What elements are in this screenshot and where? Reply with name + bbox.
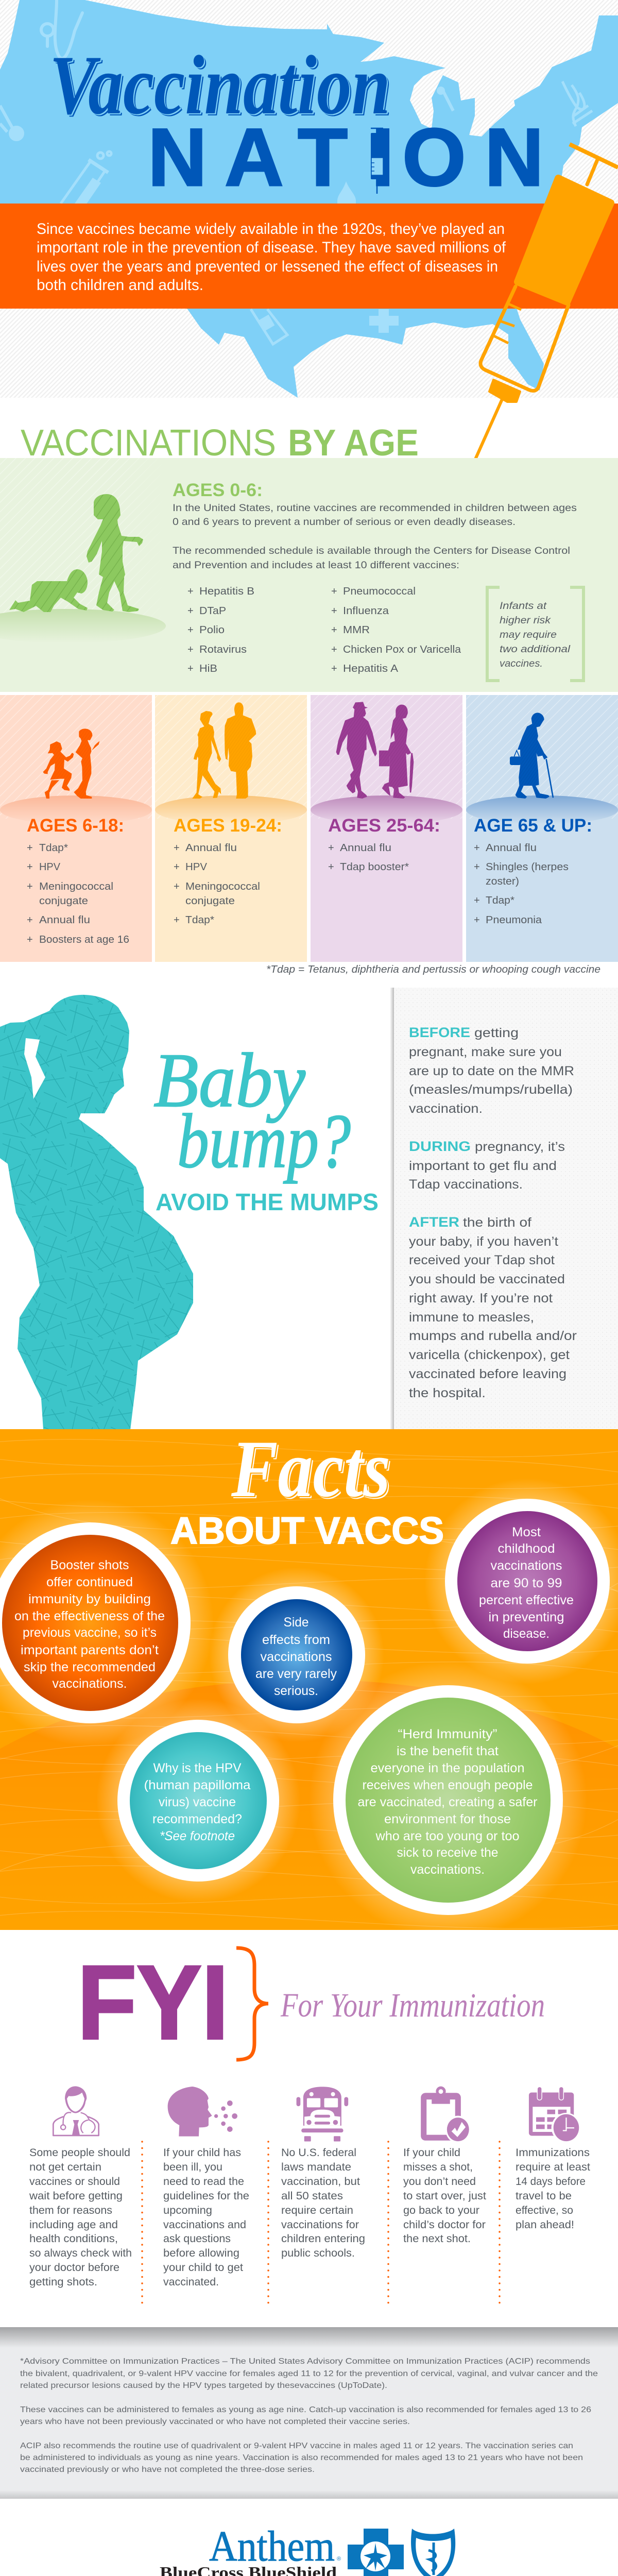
- list: vaccines column two: +: [331, 644, 337, 655]
- callout: effectiveness: Most: [512, 1525, 541, 1539]
- text block: ill child guidance: need to read the: [163, 2175, 244, 2188]
- text block: after: right away. If you’re not: [409, 1291, 553, 1306]
- panel: ages 25-64: [311, 695, 462, 962]
- list: vaccines column two: +: [331, 663, 337, 674]
- text block: ages 0-6 intro: 0 and 6 years to prevent a number of serious or even deadly diseases.: [173, 516, 516, 528]
- text block: after: your baby, if you haven’t: [409, 1234, 558, 1249]
- callout: herd immunity: receives when enough people: [363, 1778, 533, 1792]
- list: age 65 and up vaccines: +: [474, 895, 480, 906]
- list: ages 19-24 vaccines: HPV: [185, 861, 208, 873]
- text block: female catch-up: These vaccines can be administered to females as young as age nine. Catch-up vaccination is also recommended for females aged 13 to 26: [20, 2405, 591, 2414]
- list: vaccines column one: Rotavirus: [199, 644, 247, 655]
- list: ages 19-24 vaccines: conjugate: [185, 895, 235, 907]
- list: vaccines column one: +: [187, 624, 194, 636]
- callout: booster shots: previous vaccine, so it’s: [23, 1625, 157, 1640]
- map: United States, southern part: [185, 308, 544, 398]
- text block: after: you should be vaccinated: [409, 1272, 565, 1286]
- silhouette: standing child: [87, 494, 143, 612]
- callout: side effects: vaccinations: [261, 1650, 332, 1664]
- icon: doctor: [53, 2086, 99, 2136]
- ground mound: [0, 609, 166, 643]
- panel: ages 6-18: [0, 695, 152, 962]
- list: vaccines column two: +: [331, 624, 337, 636]
- text block: after: vaccinated before leaving: [409, 1367, 566, 1381]
- heading: Baby bump?: Baby: [153, 1038, 305, 1123]
- text block: before: (measles/mumps/rubella): [409, 1082, 573, 1097]
- callout: infants at higher risk: may require: [500, 629, 557, 640]
- text block: during: DURING: [409, 1139, 471, 1154]
- callout: booster shots: important parents don’t: [21, 1643, 159, 1657]
- text block: after: AFTER: [409, 1214, 459, 1230]
- panel: ages 0-6: [0, 458, 618, 692]
- text block: female catch-up: [20, 2405, 591, 2426]
- icon: medical cross: [369, 309, 399, 333]
- text block: after: [409, 1214, 577, 1400]
- text block: school requirements: public schools.: [281, 2247, 355, 2259]
- callout: herd immunity: sick to receive the: [397, 1845, 499, 1860]
- text block: before: BEFORE: [409, 1025, 470, 1040]
- list: ages 6-18 vaccines: +: [27, 842, 33, 854]
- text block: ages 0-6 intro: [173, 502, 577, 571]
- title: NATION block letters: NATION: [148, 111, 544, 203]
- callout: herd immunity: are vaccinated, creating a safer: [357, 1795, 538, 1809]
- list: vaccines column one: DTaP: [199, 605, 226, 617]
- ground mound: [155, 795, 307, 824]
- list: vaccines column one: +: [187, 663, 194, 674]
- list: ages 19-24 vaccines: Tdap*: [185, 914, 214, 926]
- heading: Age 65 and up: AGE 65 & UP:: [474, 816, 592, 836]
- list: vaccines column one: HiB: [199, 663, 217, 674]
- list: vaccines column two: [331, 586, 461, 674]
- list: ages 25-64 vaccines: Annual flu: [340, 842, 391, 854]
- list: ages 19-24 vaccines: +: [174, 914, 180, 926]
- text block: travel timing: 14 days before: [516, 2175, 586, 2188]
- ground mound: [0, 795, 152, 824]
- list: ages 6-18 vaccines: Tdap*: [39, 842, 68, 854]
- list: ages 6-18 vaccines: Annual flu: [39, 914, 90, 926]
- callout: HPV question: virus) vaccine: [159, 1795, 236, 1809]
- logo: Anthem Blue Cross Blue Shield: Anthem: [209, 2522, 335, 2570]
- list: vaccines column one: [187, 586, 254, 674]
- text block: contraindications: your doctor before: [29, 2261, 119, 2274]
- text block: missed shots: If your child: [403, 2146, 460, 2159]
- callout: booster shots: [0, 1499, 214, 1747]
- text block: contraindications: wait before getting: [29, 2190, 123, 2202]
- text block: travel timing: effective, so: [516, 2204, 573, 2216]
- ground mound: [311, 795, 462, 824]
- panel: facts background: [0, 1429, 618, 2089]
- callout: effectiveness: are 90 to 99: [490, 1576, 562, 1590]
- icon: syringe forming the letter I: [371, 128, 384, 194]
- text block: ill child guidance: vaccinated.: [163, 2276, 219, 2288]
- callout: HPV question: (human papilloma: [144, 1778, 251, 1792]
- text block: after: received your Tdap shot: [409, 1253, 555, 1267]
- text block: school requirements: all 50 states: [281, 2190, 343, 2202]
- icon: school bus: [297, 2087, 348, 2142]
- text block: contraindications: getting shots.: [29, 2276, 97, 2288]
- silhouette: pregnant woman: [0, 992, 196, 1430]
- heading: Vaccinations by age: VACCINATIONS: [21, 422, 276, 464]
- callout: booster shots: offer continued: [46, 1575, 133, 1589]
- list: age 65 and up vaccines: Pneumonia: [486, 914, 542, 926]
- text block: after: varicella (chickenpox), get: [409, 1348, 570, 1362]
- panel: hero background with US map: [0, 0, 618, 398]
- icon: thermometer: [0, 106, 23, 140]
- list: age 65 and up vaccines: +: [474, 861, 480, 873]
- icon: drop: [337, 181, 356, 205]
- silhouette: young couple: [192, 702, 256, 799]
- list: vaccines column two: +: [331, 605, 337, 617]
- text block: intro paragraph: Since vaccines became widely available in the 1920s, they’ve played an: [37, 221, 505, 238]
- text block: intro paragraph: lives over the years and prevented or lessened the effect of diseases in: [37, 258, 498, 275]
- callout: booster shots: on the effectiveness of the: [14, 1609, 165, 1623]
- callout: infants at higher risk: Infants at: [500, 600, 547, 612]
- icon: dropper: [438, 88, 453, 111]
- callout: herd immunity: everyone in the population: [371, 1761, 524, 1775]
- text block: ill child guidance: [163, 2146, 249, 2288]
- callout: herd immunity: vaccinations.: [410, 1862, 485, 1877]
- list: vaccines column two: Influenza: [343, 605, 389, 617]
- text block: travel timing: plan ahead!: [516, 2218, 574, 2231]
- text block: during: Tdap vaccinations.: [409, 1177, 523, 1192]
- callout: infants at higher risk: higher risk: [500, 615, 551, 626]
- list: ages 19-24 vaccines: Meningococcal: [185, 881, 260, 892]
- callout: herd immunity: [309, 1661, 587, 1939]
- heading: Ages 0-6: AGES 0-6:: [173, 480, 263, 500]
- icon: stethoscope: [41, 0, 82, 58]
- silhouette: older woman with cane: [510, 713, 553, 799]
- text block: ages 0-6 intro: In the United States, routine vaccines are recommended in children between ages: [173, 502, 577, 514]
- text block: missed shots: go back to your: [403, 2204, 479, 2216]
- panel: HPV footnote: [0, 2327, 618, 2499]
- text block: school requirements: children entering: [281, 2232, 365, 2245]
- list: age 65 and up vaccines: [474, 842, 569, 926]
- text block: male recommendation: [20, 2442, 583, 2474]
- callout: booster shots: vaccinations.: [53, 1676, 127, 1691]
- list: age 65 and up vaccines: Annual flu: [486, 842, 537, 854]
- text block: ill child guidance: guidelines for the: [163, 2190, 249, 2202]
- icon: clipboard with checkmark: [421, 2087, 471, 2143]
- text block: after: the hospital.: [409, 1386, 486, 1400]
- text block: intro paragraph: important role in the prevention of disease. They have saved millions of: [37, 239, 506, 256]
- text block: ill child guidance: vaccinations and: [163, 2218, 246, 2231]
- list: ages 25-64 vaccines: +: [328, 861, 334, 873]
- list: vaccines column one: +: [187, 605, 194, 617]
- text block: school requirements: vaccinations for: [281, 2218, 359, 2231]
- text block: missed shots: misses a shot,: [403, 2161, 473, 2173]
- text block: female catch-up: years who have not been previously vaccinated or who have not completed their vaccine series.: [20, 2417, 410, 2426]
- list: ages 19-24 vaccines: Annual flu: [185, 842, 237, 854]
- list: age 65 and up vaccines: Tdap*: [486, 895, 514, 906]
- list: age 65 and up vaccines: +: [474, 914, 480, 926]
- ground mound: [466, 795, 618, 824]
- icon: calendar with clock: [529, 2087, 581, 2143]
- heading: Avoid the mumps: AVOID THE MUMPS: [156, 1189, 379, 1215]
- icon: orange curly brace: [236, 1948, 268, 2060]
- text block: missed shots: to start over, just: [403, 2190, 486, 2202]
- text block: male recommendation: vaccinated previously or who have not completed the three-dose series.: [20, 2465, 315, 2474]
- text block: travel timing: travel to be: [516, 2190, 572, 2202]
- callout: effectiveness: disease.: [503, 1626, 550, 1641]
- text block: before: pregnant, make sure you: [409, 1045, 562, 1059]
- text block: school requirements: require certain: [281, 2204, 353, 2216]
- list: vaccines column two: MMR: [343, 624, 370, 636]
- callout: booster shots: Booster shots: [50, 1558, 129, 1572]
- text block: ill child guidance: before allowing: [163, 2247, 239, 2259]
- list: vaccines column one: +: [187, 586, 194, 597]
- callout: HPV question: Why is the HPV: [153, 1761, 242, 1775]
- text block: travel timing: Immunizations: [516, 2146, 590, 2159]
- silhouette: adult couple: [336, 702, 414, 799]
- text block: missed shots: child’s doctor for: [403, 2218, 486, 2231]
- callout: herd immunity: “Herd Immunity”: [398, 1727, 497, 1741]
- text block: before: are up to date on the MMR: [409, 1064, 574, 1078]
- text block: missed shots: you don’t need: [403, 2175, 476, 2188]
- text block: ill child guidance: been ill, you: [163, 2161, 222, 2173]
- list: vaccines column one: +: [187, 644, 194, 655]
- footnote: Tdap definition: *Tdap = Tetanus, diphtheria and pertussis or whooping cough vaccine: [266, 964, 600, 975]
- callout: infants at higher risk: [487, 587, 583, 681]
- text block: school requirements: laws mandate: [281, 2161, 351, 2173]
- text block: contraindications: Some people should: [29, 2146, 130, 2159]
- logo: blue cross: [348, 2529, 404, 2576]
- callout: HPV question: recommended?: [152, 1812, 242, 1826]
- heading: For Your Immunization: For Your Immunization: [280, 1987, 545, 2024]
- heading: Vaccinations by age: [21, 422, 419, 464]
- text block: contraindications: health conditions,: [29, 2232, 118, 2245]
- text block: intro paragraph: [37, 221, 506, 294]
- silhouette: two children: [43, 728, 99, 799]
- callout: infants at higher risk: two additional: [500, 643, 571, 655]
- callout: effectiveness: vaccinations: [490, 1558, 562, 1573]
- text block: after: immune to measles,: [409, 1310, 534, 1325]
- callout: side effects: [209, 1567, 384, 1742]
- icon: test tube: [61, 151, 111, 206]
- icon: head with droplets: [168, 2087, 237, 2137]
- logo: blue shield: [411, 2529, 455, 2576]
- callout: booster shots: immunity by building: [28, 1592, 151, 1606]
- text block: male recommendation: ACIP also recommends the routine use of quadrivalent or 9-valent HPV vaccine in males aged 11 or 12 years. The vaccination series can: [20, 2442, 573, 2450]
- callout: HPV question: [96, 1699, 300, 1903]
- panel: pregnancy advice: [390, 988, 618, 1430]
- logo: Anthem Blue Cross Blue Shield: [160, 2522, 455, 2576]
- icon: DNA: [562, 81, 592, 126]
- heading: Vaccinations by age: BY AGE: [288, 422, 419, 464]
- text block: ill child guidance: your child to get: [163, 2261, 243, 2274]
- text block: contraindications: so always check with: [29, 2247, 132, 2259]
- list: ages 19-24 vaccines: [174, 842, 260, 926]
- list: ages 6-18 vaccines: +: [27, 934, 33, 945]
- callout: effectiveness: percent effective: [479, 1593, 574, 1607]
- callout: booster shots: skip the recommended: [24, 1660, 156, 1674]
- heading: About vaccs: ABOUT VACCS: [170, 1510, 444, 1552]
- list: ages 6-18 vaccines: +: [27, 914, 33, 926]
- icon: large orange syringe: [469, 144, 618, 473]
- text block: before: getting: [474, 1026, 519, 1040]
- text block: contraindications: [29, 2146, 132, 2288]
- list: vaccines column two: Pneumococcal: [343, 586, 416, 597]
- text block: before: vaccination.: [409, 1101, 483, 1116]
- silhouette: crawling baby: [9, 569, 88, 612]
- text block: travel timing: [516, 2146, 590, 2231]
- callout: herd immunity: environment for those: [384, 1812, 511, 1826]
- text block: contraindications: vaccines or should: [29, 2175, 120, 2188]
- heading: Ages 6-18: AGES 6-18:: [27, 816, 124, 836]
- text block: during: [409, 1139, 565, 1192]
- callout: side effects: serious.: [274, 1684, 318, 1698]
- text block: ill child guidance: ask questions: [163, 2232, 231, 2245]
- text block: male recommendation: be administered to individuals as young as nine years. Vaccination is also recommended for males aged 13 to 21 years who have not been: [20, 2453, 583, 2462]
- text block: travel timing: require at least: [516, 2161, 590, 2173]
- text block: ACIP recommendation: *Advisory Committee on Immunization Practices – The United States Advisory Committee on Immunization Practices (ACIP) recommends: [20, 2357, 590, 2366]
- heading: Ages 25-64: AGES 25-64:: [328, 816, 440, 836]
- callout: effectiveness: childhood: [497, 1541, 555, 1556]
- text block: intro paragraph: both children and adults.: [37, 277, 203, 294]
- text block: contraindications: not get certain: [29, 2161, 101, 2173]
- callout: side effects: Side: [283, 1615, 309, 1630]
- text block: ACIP recommendation: the bivalent, quadrivalent, or 9-valent HPV vaccine for females aged 11 to 12 for the prevention of cervical, vaginal, and vulvar cancer and the: [20, 2369, 598, 2378]
- text block: during: pregnancy, it’s: [475, 1140, 565, 1154]
- heading: FYI: FYI: [77, 1944, 229, 2061]
- list: ages 19-24 vaccines: +: [174, 842, 180, 854]
- text block: school requirements: vaccination, but: [281, 2175, 360, 2188]
- text block: during: important to get flu and: [409, 1159, 557, 1173]
- text block: contraindications: including age and: [29, 2218, 118, 2231]
- callout: effectiveness: [424, 1478, 618, 1684]
- title: Vaccination script: Vaccination: [49, 39, 390, 132]
- icon: bandage: [251, 309, 287, 344]
- callout: infants at higher risk: vaccines.: [500, 658, 543, 669]
- logo: Anthem Blue Cross Blue Shield: ®: [337, 2556, 341, 2562]
- text block: school requirements: No U.S. federal: [281, 2146, 356, 2159]
- heading: Baby bump?: [153, 1038, 351, 1184]
- heading: Baby bump?: bump?: [177, 1098, 351, 1184]
- text block: ages 0-6 intro: and Prevention and includes at least 10 different vaccines:: [173, 560, 459, 571]
- panel: age 65 and up: [466, 695, 618, 962]
- list: vaccines column two: Chicken Pox or Varicella: [343, 644, 461, 655]
- list: ages 25-64 vaccines: [328, 842, 409, 873]
- callout: effectiveness: in preventing: [488, 1610, 564, 1624]
- heading: Ages 19-24: AGES 19-24:: [174, 816, 282, 836]
- list: vaccines column two: +: [331, 586, 337, 597]
- list: vaccines column one: Hepatitis B: [199, 586, 254, 597]
- panel: ages 19-24: [155, 695, 307, 962]
- list: ages 25-64 vaccines: +: [328, 842, 334, 854]
- list: ages 6-18 vaccines: conjugate: [39, 895, 88, 907]
- text block: missed shots: [403, 2146, 486, 2245]
- list: ages 6-18 vaccines: Meningococcal: [39, 881, 113, 892]
- list: ages 6-18 vaccines: HPV: [39, 861, 61, 873]
- text block: ACIP recommendation: related precursor lesions caused by the HPV types targeted by thesevaccines (UpToDate).: [20, 2381, 387, 2390]
- list: ages 6-18 vaccines: [27, 842, 129, 945]
- text block: ACIP recommendation: [20, 2357, 598, 2390]
- list: age 65 and up vaccines: Shingles (herpes: [486, 861, 569, 873]
- callout: side effects: are very rarely: [255, 1667, 337, 1681]
- list: ages 19-24 vaccines: +: [174, 861, 180, 873]
- text block: after: mumps and rubella and/or: [409, 1329, 577, 1343]
- text block: contraindications: them for reasons: [29, 2204, 112, 2216]
- list: ages 6-18 vaccines: +: [27, 881, 33, 892]
- text block: before: [409, 1025, 574, 1116]
- panel: orange intro band: [0, 204, 618, 309]
- heading: Facts: Facts: [231, 1424, 390, 1514]
- text block: after: the birth of: [463, 1215, 531, 1230]
- callout: side effects: effects from: [262, 1633, 330, 1647]
- text block: ill child guidance: upcoming: [163, 2204, 212, 2216]
- list: age 65 and up vaccines: +: [474, 842, 480, 854]
- callout: HPV question: *See footnote: [160, 1829, 235, 1843]
- list: ages 6-18 vaccines: Boosters at age 16: [39, 934, 129, 945]
- callout: herd immunity: who are too young or too: [375, 1829, 519, 1843]
- map: United States, north part: [0, 0, 618, 206]
- text block: ill child guidance: If your child has: [163, 2146, 241, 2159]
- callout: herd immunity: is the benefit that: [397, 1744, 499, 1758]
- list: vaccines column one: Polio: [199, 624, 225, 636]
- text block: ages 0-6 intro: The recommended schedule is available through the Centers for Disease Control: [173, 545, 570, 556]
- text block: missed shots: the next shot.: [403, 2232, 471, 2245]
- list: ages 6-18 vaccines: +: [27, 861, 33, 873]
- list: vaccines column two: Hepatitis A: [343, 663, 399, 674]
- list: age 65 and up vaccines: zoster): [486, 876, 519, 887]
- list: ages 19-24 vaccines: +: [174, 881, 180, 892]
- text block: school requirements: [281, 2146, 365, 2259]
- list: ages 25-64 vaccines: Tdap booster*: [340, 861, 409, 873]
